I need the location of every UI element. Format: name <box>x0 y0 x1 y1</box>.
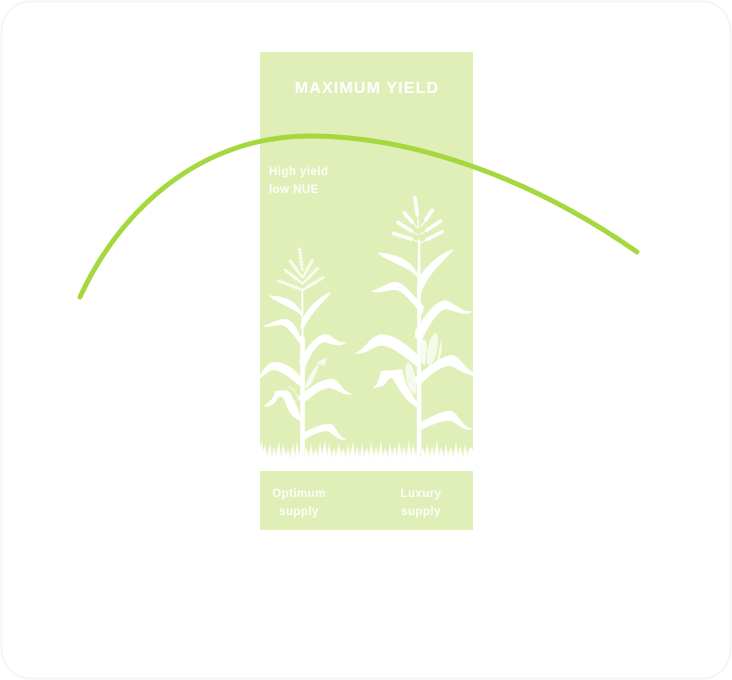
left plant tassel <box>278 248 323 290</box>
text: luxury supply: Luxury <box>400 488 442 500</box>
plant: luxury supply corn <box>357 197 472 453</box>
text: high yield low NUE: High yield <box>269 166 328 178</box>
text: luxury supply: supply <box>401 506 441 518</box>
text: high yield low NUE: low NUE <box>269 184 319 196</box>
ground fade <box>260 448 473 462</box>
text: high yield low NUE <box>269 166 328 196</box>
text: optimum supply <box>272 488 326 518</box>
icon: upper ear <box>424 332 440 367</box>
right plant tassel <box>393 197 442 243</box>
text: luxury supply <box>400 488 442 518</box>
grass ground <box>260 440 473 466</box>
heading: maximum yield: MAXIMUM YIELD <box>295 80 439 97</box>
icon: left plant ear <box>305 363 319 389</box>
text: optimum supply: Optimum <box>272 488 326 500</box>
yield response curve <box>80 136 637 297</box>
panel: maximum yield column <box>260 52 473 464</box>
panel: supply labels <box>260 471 473 530</box>
text: optimum supply: supply <box>279 506 319 518</box>
plant: optimum supply corn <box>260 248 351 453</box>
icon: lower ear <box>403 362 419 395</box>
